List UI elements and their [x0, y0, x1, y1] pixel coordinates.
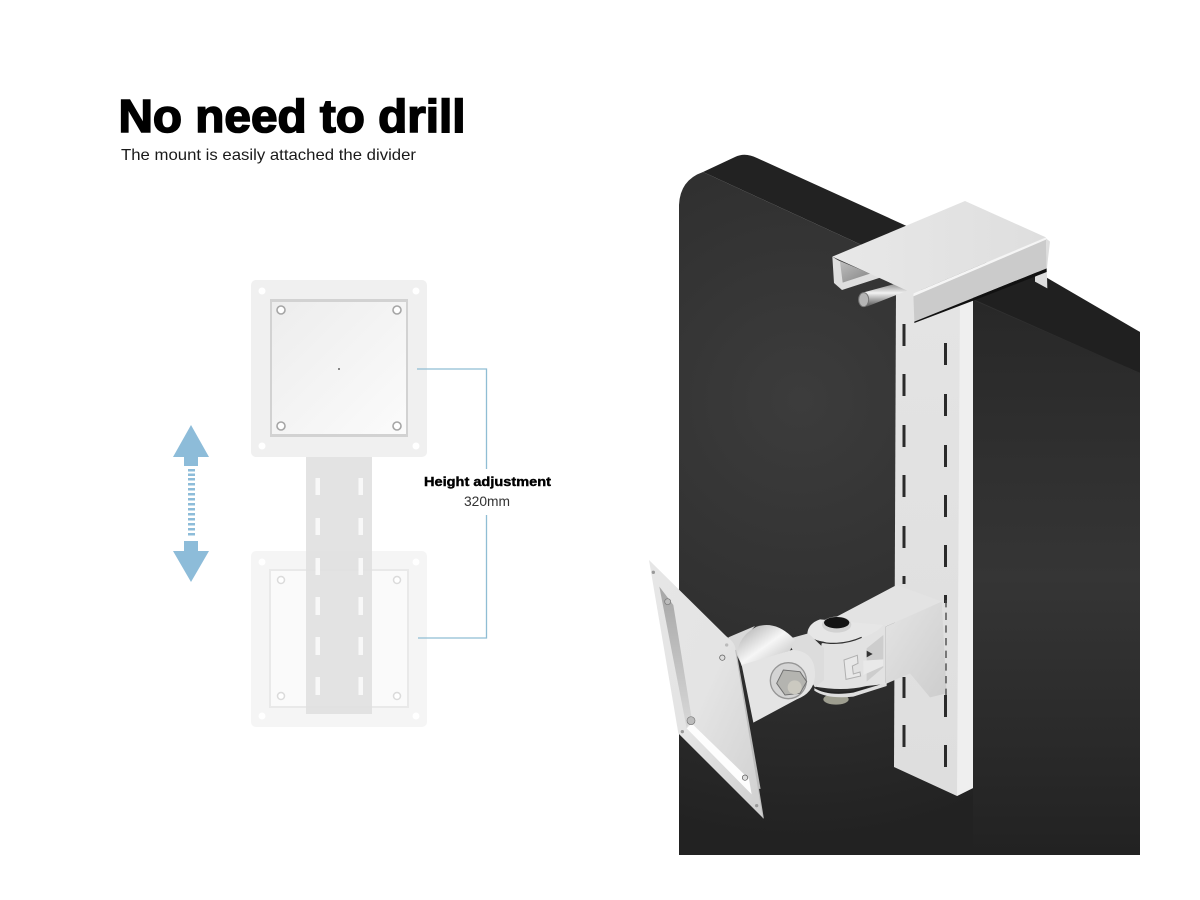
bracket line: travel range [417, 369, 486, 638]
plate side edge [736, 650, 763, 818]
product illustration: mount on divider [649, 155, 1140, 855]
recess left strip [659, 587, 692, 728]
clamp front lip [913, 237, 1047, 322]
hinge barrel [737, 625, 795, 666]
channel interior [836, 259, 878, 286]
back flange [1035, 238, 1050, 288]
swivel top disc [807, 617, 883, 644]
arm side bracket [886, 602, 947, 697]
top clamp bracket [832, 201, 1050, 323]
ghost lower plate [251, 551, 427, 727]
subtitle: The mount is easily attached the divider [121, 147, 417, 164]
swivel body [815, 625, 886, 689]
arm top face [808, 585, 942, 642]
plate face [649, 560, 763, 818]
recess lower strip [687, 723, 752, 794]
channel return lip [832, 257, 883, 290]
lower washer and bolt [814, 683, 887, 705]
label: height adjustment: Height adjustment [424, 474, 552, 489]
divider panel [679, 155, 1140, 855]
clip [844, 655, 861, 679]
screws [652, 571, 758, 807]
icon: up and down arrow [173, 425, 209, 582]
label: 320mm: 320mm [464, 493, 510, 509]
clamp top face [832, 201, 1046, 293]
hinge side plate [742, 650, 815, 723]
title: No need to drill [118, 90, 466, 142]
nut and bolt [770, 663, 807, 699]
locking pin [859, 282, 907, 307]
hinge link [787, 633, 824, 687]
swivel cap [822, 617, 851, 633]
swivel arm [728, 585, 947, 723]
notched edge [944, 600, 948, 695]
diagram: height adjustment [173, 280, 552, 727]
vertical rail [894, 290, 973, 796]
hinge back band [728, 626, 755, 665]
VESA plate [649, 560, 763, 818]
upper VESA plate [251, 280, 427, 457]
sliding rail [306, 457, 372, 714]
slot pocket [867, 635, 883, 682]
